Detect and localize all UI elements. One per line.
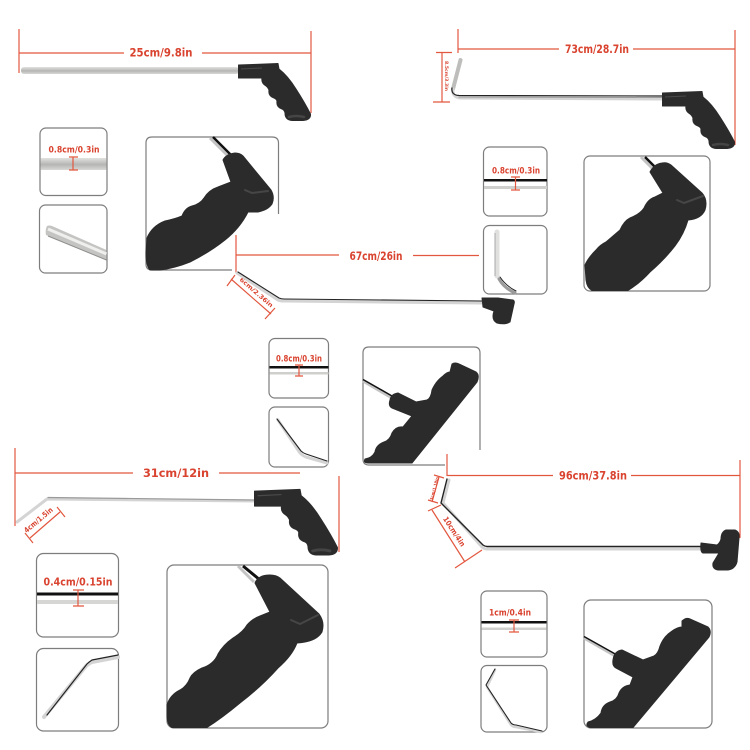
panel: 1cm thickness detail [481,591,547,657]
dimension: 67cm/26in [236,235,479,273]
tool 2: 73cm rod [433,29,735,148]
dimension: 25cm/9.8in [19,29,311,113]
panel: 0.4cm thickness detail: 0.4cm/0.15in [44,576,112,588]
dimension: 6cm/2.36in: 6cm/2.36in [238,276,274,309]
side handle [482,298,514,324]
bent rod [17,498,255,522]
dimension: 31cm/12in: 31cm/12in [143,466,209,480]
panel: T-handle close-up 1 [363,347,480,465]
dimension: 8.5cm hook length: 8.5cm/3.3in [443,61,449,91]
dimension: 8.5cm hook length [433,52,452,102]
tool 1: 25cm rod [19,29,311,120]
dimension: 73cm/28.7in [458,29,735,145]
double-bent rod [441,479,702,549]
panel: rod tip detail [40,205,107,273]
dimension: 96cm/37.8in: 96cm/37.8in [559,468,627,482]
panel: 0.4cm thickness detail [36,554,118,637]
T handle [701,530,739,570]
tool 4: 31cm rod [15,448,339,555]
pistol handle [238,64,311,120]
dimension: 4cm/1.5in: 4cm/1.5in [22,505,55,535]
hooked rod [452,60,662,99]
panel: bend detail [36,648,118,731]
dimension: 4cm/1.5in [22,505,65,543]
tool 5: 96cm rod [428,454,740,570]
dimension: 25cm/9.8in: 25cm/9.8in [130,46,192,60]
panel: T-handle close-up 2 [584,600,712,728]
bent rod [237,272,482,303]
panel: 0.8cm thickness detail: 0.8cm/0.3in [492,166,540,176]
dimension: 73cm/28.7in: 73cm/28.7in [565,42,629,56]
rod [21,67,239,74]
pistol handle [255,489,337,555]
panel: handle close-up 1 [146,137,278,270]
panel: bend detail [269,407,328,467]
dimension: 6cm/2.36in [227,275,275,319]
tool 3: 67cm rod [227,235,514,324]
dimension: 96cm/37.8in [447,454,740,538]
panel: 0.8cm thickness detail: 0.8cm/0.3in [276,354,322,364]
panel: hook detail [481,666,547,732]
dimension: 31cm/12in [15,448,339,552]
panel: 0.8cm thickness detail [484,147,547,216]
panel: handle close-up 3 [167,565,328,728]
panel: 1cm thickness detail: 1cm/0.4in [489,608,531,618]
panel: 0.8cm thickness detail: 0.8cm/0.3in [48,146,100,156]
dimension: 3cm hook [428,475,444,503]
dimension: 10cm/4in: 10cm/4in [441,515,467,548]
panel: 0.8cm thickness detail [40,128,107,196]
panel: hook detail [484,226,547,294]
panel: handle close-up 2 [584,156,710,291]
dimension: 3cm hook: 3cm/1.18in [429,476,441,501]
dimension: 67cm/26in: 67cm/26in [350,249,402,263]
panel: 0.8cm thickness detail [269,338,328,398]
dimension: 10cm/4in [428,505,482,568]
pistol handle [662,92,735,148]
